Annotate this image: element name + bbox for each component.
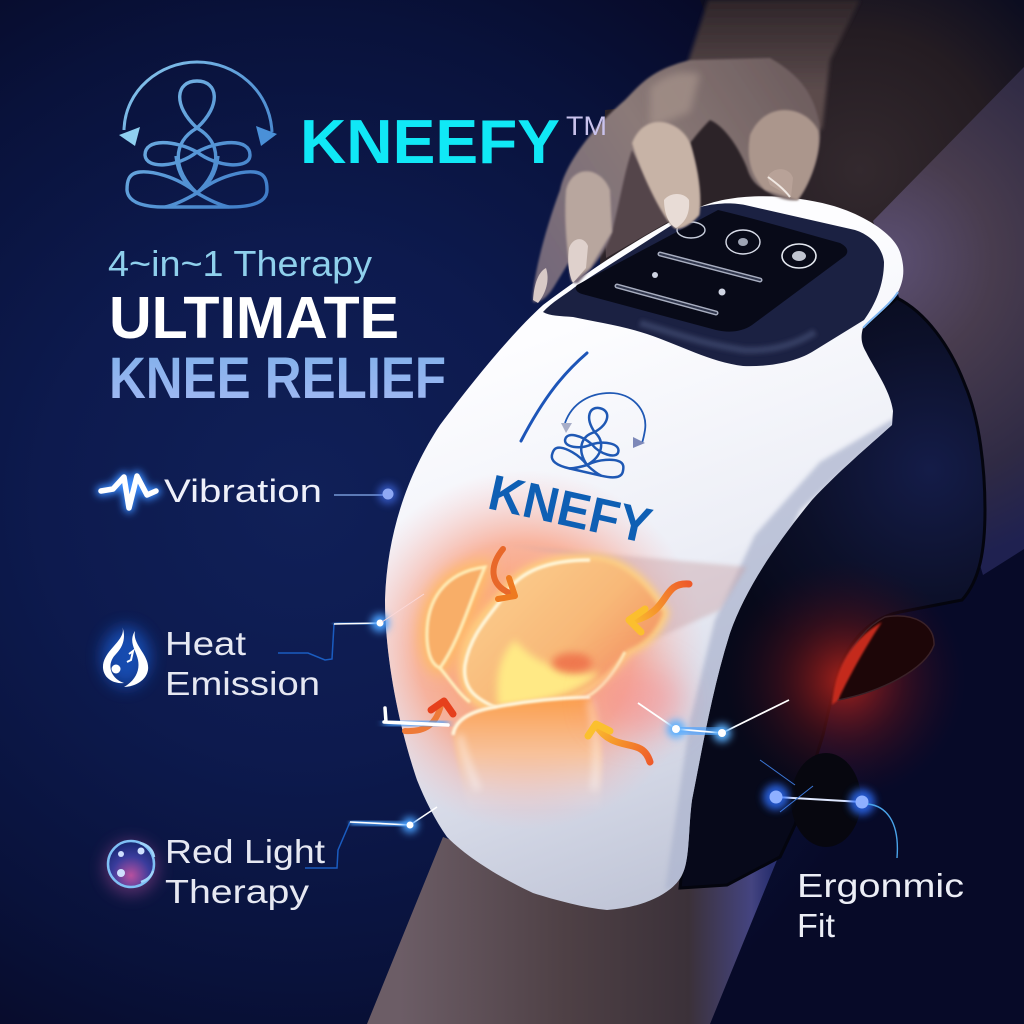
second finger — [565, 171, 612, 282]
feature: ergonomic fit — [760, 760, 964, 944]
connector — [334, 484, 398, 504]
connector: knee right — [638, 700, 789, 742]
forearm — [688, 0, 860, 130]
small icons — [652, 272, 726, 296]
pink glow — [595, 665, 685, 735]
second nail — [568, 239, 588, 283]
label: Red Light — [165, 833, 325, 870]
red light glow — [725, 560, 965, 800]
lower leg — [367, 837, 777, 1024]
index finger — [632, 122, 700, 228]
translucent band — [539, 548, 746, 636]
control bezel — [543, 203, 884, 366]
button: power — [677, 222, 705, 238]
logo arc — [124, 62, 272, 132]
halo — [385, 482, 691, 814]
label line 2: Emission — [165, 665, 320, 702]
femur shape — [440, 560, 663, 708]
logo figure — [127, 81, 267, 207]
thumb — [749, 110, 819, 200]
logo left arrowhead — [119, 127, 140, 146]
knee glow — [385, 482, 746, 814]
icon: light orb — [104, 841, 158, 895]
hot spot — [552, 653, 592, 673]
knuckle light — [650, 73, 700, 128]
connector — [278, 594, 424, 660]
label: Ergonmic — [797, 867, 964, 904]
accent line — [521, 353, 587, 441]
upper leg behind the device — [700, 0, 1024, 575]
headline line 2: KNEE RELIEF — [109, 346, 446, 411]
icon: flame drop — [102, 626, 150, 687]
inner yellow — [497, 640, 600, 707]
left condyle — [427, 567, 485, 668]
hand silhouette — [533, 58, 820, 302]
device logo arrowheads — [561, 423, 572, 433]
connector — [305, 807, 437, 868]
brand name: KNEEFY — [300, 108, 560, 177]
shell lower shading — [665, 419, 895, 890]
rim highlight — [863, 292, 898, 328]
bone rim — [453, 697, 590, 735]
button: intensity — [782, 244, 816, 268]
far-left nail — [533, 268, 548, 303]
trademark: TM — [566, 111, 607, 141]
label: Vibration — [164, 473, 322, 509]
slider top — [660, 254, 760, 280]
slider bottom — [617, 286, 716, 313]
sleeve — [680, 298, 985, 888]
device brand text: KNEFY — [484, 464, 657, 554]
red pad — [832, 616, 934, 705]
label line 2: Fit — [797, 907, 835, 944]
bezel lip highlight — [640, 323, 815, 350]
icon: waveform — [101, 476, 156, 508]
dark gap under hand — [600, 90, 795, 265]
device logo figure — [550, 400, 636, 480]
label: Heat — [165, 625, 246, 662]
arrow: bottom right — [588, 724, 650, 762]
logo — [119, 62, 277, 207]
subtitle: 4~in~1 Therapy — [108, 243, 372, 284]
connector: knee left — [384, 708, 448, 725]
headline line 1: ULTIMATE — [109, 285, 399, 351]
hand — [533, 58, 820, 303]
feature: red light therapy — [104, 807, 437, 910]
light columns — [460, 700, 596, 790]
device shell — [340, 196, 903, 910]
device logo arc — [565, 393, 645, 443]
logo right arrowhead — [256, 126, 277, 146]
arrow: right — [629, 584, 689, 632]
lower strap bump — [791, 753, 861, 847]
feature: vibration — [101, 473, 398, 509]
thumb nail — [767, 169, 793, 197]
lower bone — [452, 695, 603, 782]
device logo — [550, 393, 645, 480]
feature: heat emission — [102, 594, 424, 702]
index nail — [664, 194, 689, 228]
button: mode — [726, 230, 760, 254]
arrow: top — [493, 549, 515, 599]
connector — [760, 760, 897, 858]
touch screen — [576, 210, 847, 332]
label line 2: Therapy — [165, 873, 310, 910]
palm shadow — [600, 120, 668, 258]
arrow: bottom left — [405, 701, 453, 731]
